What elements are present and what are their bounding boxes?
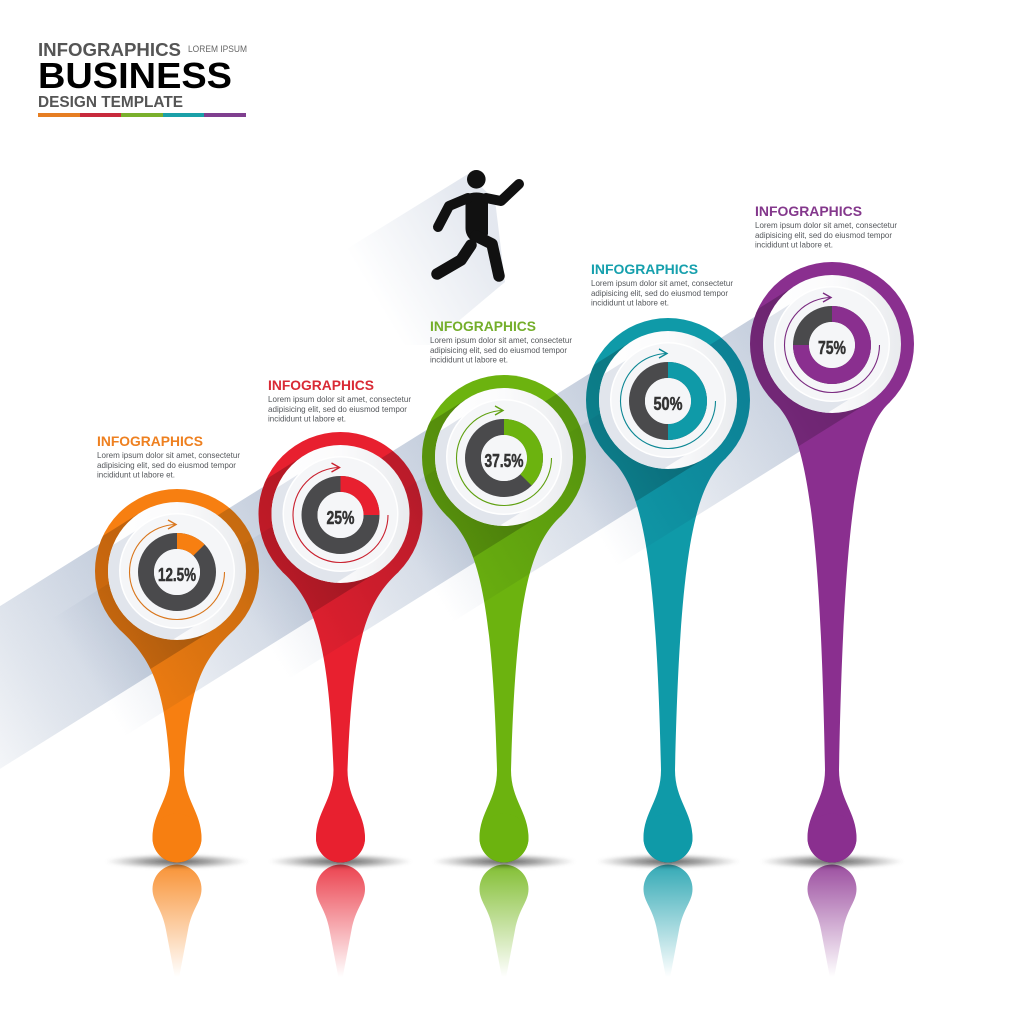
donut chart [637, 370, 699, 432]
text block: orange: INFOGRAPHICS [97, 434, 203, 449]
title block [38, 39, 247, 117]
donut chart [310, 484, 372, 546]
icon: running person [437, 170, 519, 276]
pin body 4: teal [380, 318, 750, 862]
text block: teal [591, 262, 733, 308]
text block: green: INFOGRAPHICS [430, 319, 536, 334]
pin body 3: green [216, 375, 586, 862]
text block: purple [755, 204, 897, 250]
pin body 2: red [52, 432, 422, 862]
text block: purple: incididunt ut labore et. [755, 240, 833, 250]
progress arc with arrow [784, 293, 880, 392]
progress arc with arrow [130, 520, 224, 619]
text block: teal: adipisicing elit, sed do eiusmod tempor [591, 288, 728, 298]
text block: orange: incididunt ut labore et. [97, 470, 175, 480]
text block: teal: incididunt ut labore et. [591, 298, 669, 308]
text block: orange: adipisicing elit, sed do eiusmod tempor [97, 460, 236, 470]
text block: orange [97, 434, 240, 480]
text block: teal: INFOGRAPHICS [591, 262, 698, 277]
progress arc with arrow [293, 463, 388, 562]
donut chart [146, 541, 208, 603]
text block: red: adipisicing elit, sed do eiusmod tempor [268, 404, 407, 414]
colour rule [38, 113, 246, 117]
pin body 1: orange [0, 489, 259, 862]
text block: green: Lorem ipsum dolor sit amet, consectetur [430, 335, 572, 345]
value: 12.5% [158, 565, 196, 585]
dial 3: 37.5% [435, 388, 573, 526]
dial 5: 75% [763, 275, 901, 413]
runner long shadow [345, 174, 505, 345]
bulb bottoms over floor shadow [152, 814, 856, 862]
floor shadows [105, 854, 904, 869]
dial 1: 12.5% [108, 502, 246, 640]
text block: green: incididunt ut labore et. [430, 354, 508, 364]
text block: purple: adipisicing elit, sed do eiusmod tempor [755, 230, 892, 240]
subtitle: lorem ipsum: LOREM IPSUM [188, 44, 247, 54]
title: business: BUSINESS [38, 55, 232, 96]
pin bodies with long shadows [0, 262, 914, 862]
value: 50% [654, 394, 682, 414]
dial 4: 50% [599, 331, 737, 469]
text block: red: incididunt ut labore et. [268, 414, 346, 424]
text block: teal: Lorem ipsum dolor sit amet, consectetur [591, 278, 733, 288]
value: 75% [818, 338, 846, 358]
donut chart [801, 314, 863, 376]
title: infographics: INFOGRAPHICS [38, 39, 181, 60]
text block: red [268, 378, 411, 424]
donut chart [473, 427, 535, 489]
title: design template: DESIGN TEMPLATE [38, 94, 183, 111]
text block: green [430, 319, 572, 364]
text block: purple: Lorem ipsum dolor sit amet, consectetur [755, 220, 897, 230]
value: 25% [326, 508, 354, 528]
text block: purple: INFOGRAPHICS [755, 204, 862, 219]
dial 2: 25% [272, 445, 410, 583]
progress arc with arrow [456, 406, 552, 505]
value: 37.5% [484, 451, 524, 471]
text block: orange: Lorem ipsum dolor sit amet, consectetur [97, 450, 240, 460]
reflections [152, 864, 856, 978]
progress arc with arrow [620, 349, 716, 448]
text block: red: Lorem ipsum dolor sit amet, consectetur [268, 394, 411, 404]
text block: red: INFOGRAPHICS [268, 378, 374, 393]
text block: green: adipisicing elit, sed do eiusmod tempor [430, 345, 567, 355]
pin body 5: purple [544, 262, 914, 862]
